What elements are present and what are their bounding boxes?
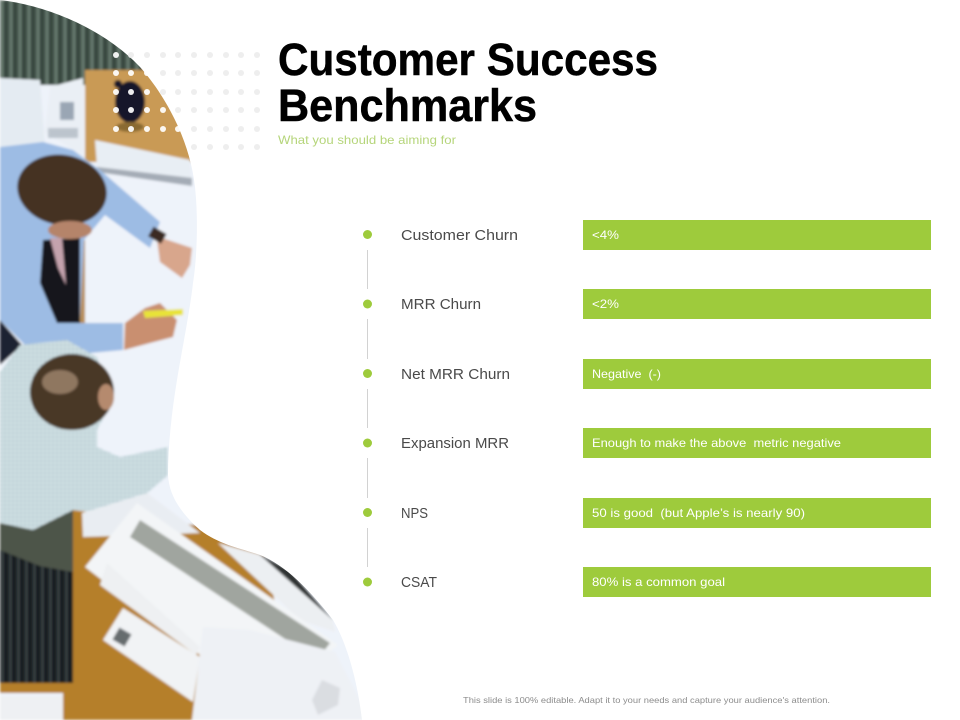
mug [114,80,145,132]
footer note: This slide is 100% editable. Adapt it to your needs and capture your audience's attention. [463,695,830,705]
title: Customer Success [278,34,658,85]
row: CSAT: CSAT [401,574,437,591]
photo: two men reviewing blueprints at a desk, in an organic blob shape [0,0,400,720]
sheet under elbow [82,493,200,537]
row: Net MRR Churn [363,359,931,389]
background roll and shadow [216,541,332,622]
row: Expansion MRR: Enough to make the above metric negative [592,436,841,450]
man 2 shirt [0,340,168,530]
lower table [0,510,300,720]
subtitle: What you should be aiming for [278,133,456,147]
vest and tie [0,238,80,365]
wood edge [80,240,85,324]
row: CSAT: 80% is a common goal [592,575,725,589]
timeline connector lines [366,250,368,567]
row: Expansion MRR: Expansion MRR [401,435,509,452]
small roll [103,608,200,702]
dot grid over photo [113,52,181,132]
dot grid decoration [128,52,260,150]
row: NPS: NPS [401,505,428,522]
front sheet [190,638,341,720]
hand with highlighter [124,303,183,350]
top carpet [0,0,144,87]
row: Net MRR Churn: Negative (-) [592,367,661,381]
man 2 head [30,354,114,430]
row: CSAT [363,567,931,597]
row: MRR Churn [363,289,931,319]
row: Net MRR Churn: Net MRR Churn [401,366,510,383]
row: MRR Churn: <2% [592,297,619,311]
blueprint roll [85,503,338,662]
row: NPS: 50 is good (but Apple’s is nearly 90) [592,506,805,520]
lower floor and pants [0,510,73,685]
row: Customer Churn [363,220,931,250]
row: Expansion MRR [363,428,931,458]
left papers [0,78,83,155]
man 1 hand and watch [148,227,192,278]
row: Customer Churn: Customer Churn [401,227,518,244]
man 1 head [16,153,108,242]
title [278,34,658,131]
row: MRR Churn: MRR Churn [401,296,481,313]
row: NPS [363,498,931,528]
rolled paper [95,140,192,186]
desk [85,70,200,162]
title: Benchmarks [278,80,537,131]
row: Customer Churn: <4% [592,228,619,242]
man 1 shirt [0,142,160,353]
